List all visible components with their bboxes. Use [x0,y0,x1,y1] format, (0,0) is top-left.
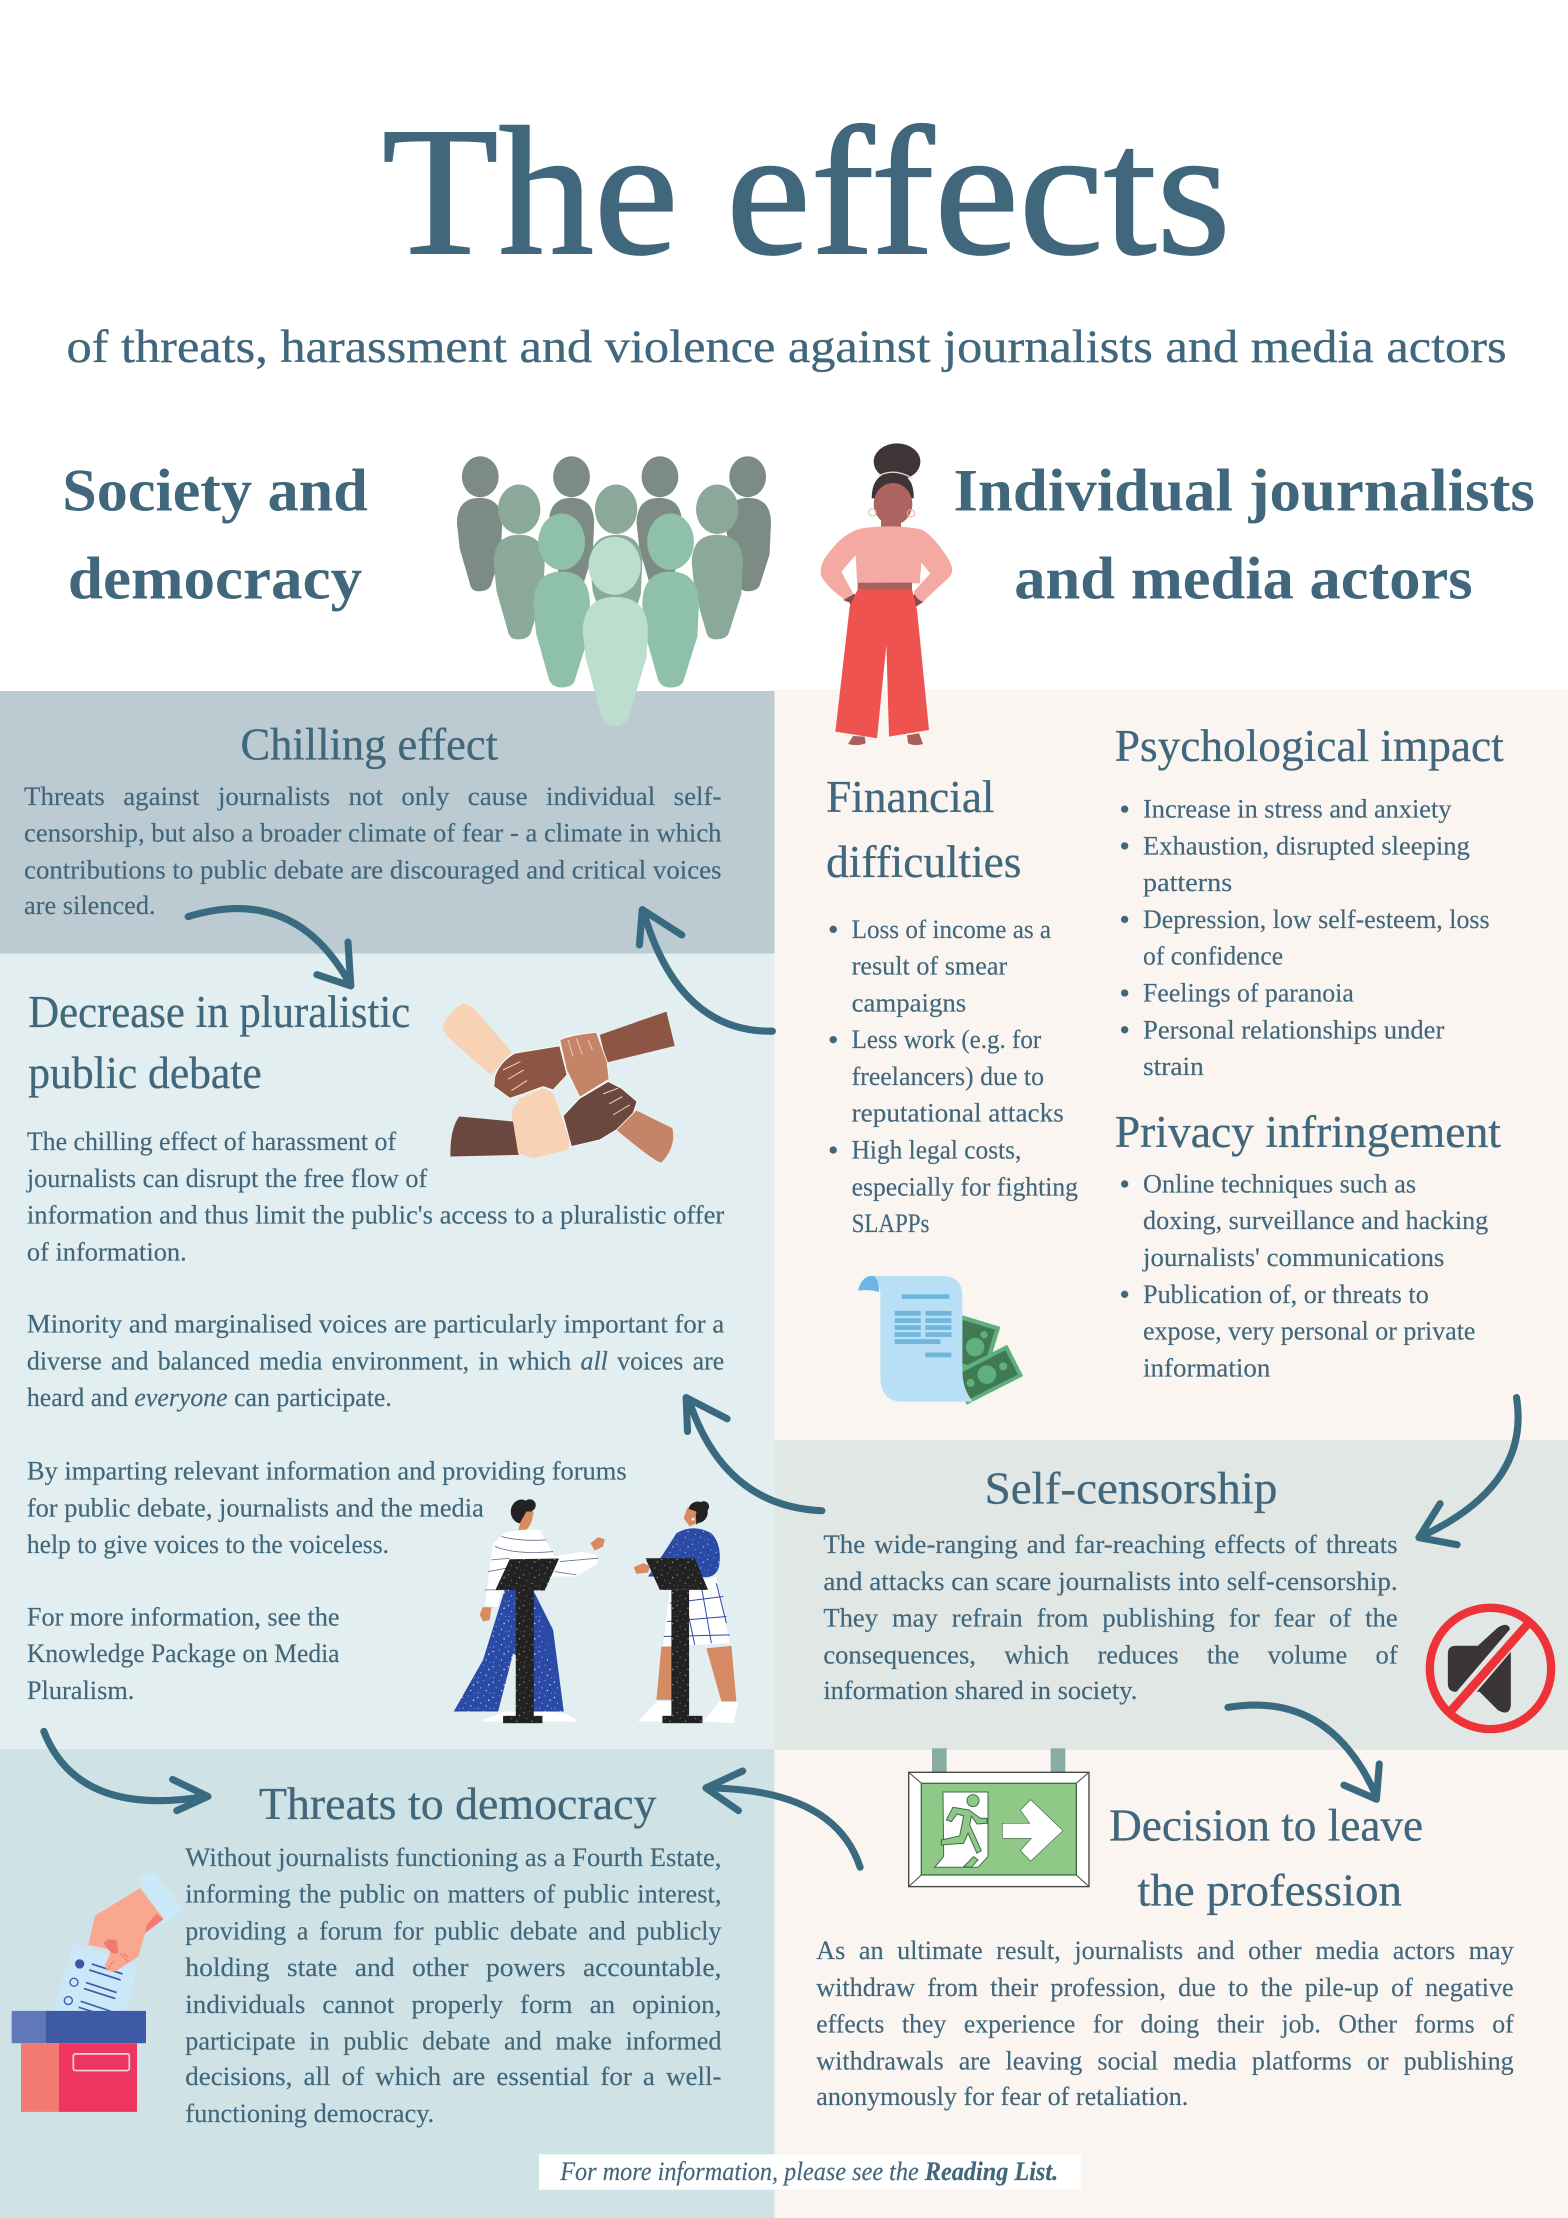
list: financial difficulties: SLAPPs [852,1209,929,1238]
arrow: chilling effect to decrease in debate [188,909,351,986]
footer note: For more information, please see the Reading List. [559,2157,1058,2186]
paragraph: self-censorship: information shared in society. [823,1676,1137,1705]
panel: self-censorship background [775,1440,1568,1750]
right speaker [634,1501,738,1723]
left speaker [450,1499,605,1723]
paragraph: self-censorship: consequences, which reduces the volume of [823,1641,1398,1669]
list: psychological impact: Feelings of paranoia [1143,978,1354,1007]
list: psychological impact: Increase in stress and anxiety [1143,795,1451,824]
list: financial difficulties: High legal costs, [852,1136,1021,1165]
list: privacy infringement: expose, very personal or private [1143,1317,1475,1346]
panel: threats to democracy background [0,1749,775,2218]
panel: decision to leave background [775,1750,1568,2218]
heading: individual journalists and media actors: and media actors [1014,545,1473,612]
paragraph: chilling effect: contributions to public debate are discouraged and critical voices [24,855,721,884]
heading: privacy infringement: Privacy infringement [1115,1107,1501,1157]
paragraphs: pluralistic debate: Pluralism. [27,1676,134,1705]
icon: legal bill and money [858,1276,1023,1405]
paragraph: threats to democracy: functioning democracy. [185,2099,434,2128]
list: psychological impact: of confidence [1143,942,1283,971]
list: psychological impact: Exhaustion, disrupted sleeping [1143,831,1470,860]
paragraphs: pluralistic debate: heard and everyone can participate. [27,1383,392,1412]
paragraphs: pluralistic debate: diverse and balanced media environment, in which all voices are [27,1346,724,1375]
text block: psychological impact [1115,721,1504,1081]
list: financial difficulties: freelancers) due to [852,1062,1044,1091]
paragraph: decision to leave: anonymously for fear of retaliation. [816,2082,1188,2111]
paragraph: decision to leave: withdraw from their profession, due to the pile-up of negative [816,1973,1514,2002]
list: privacy infringement: Publication of, or threats to [1143,1280,1429,1309]
text block: privacy infringement [1115,1107,1501,1382]
heading: society and democracy: democracy [68,545,362,612]
paragraphs: pluralistic debate: By imparting relevant information and providing forums [27,1457,627,1486]
heading: decrease in pluralistic public debate: public debate [28,1048,262,1098]
heading: decision to leave the profession: Decision to leave [1109,1800,1423,1850]
list: financial difficulties: Less work (e.g. for [852,1025,1041,1054]
arrow: individual panel to chilling effect [639,910,772,1031]
paragraph: threats to democracy: decisions, all of which are essential for a well- [185,2062,721,2091]
paragraph: self-censorship: They may refrain from publishing for fear of the [823,1604,1398,1633]
text block: decrease in pluralistic public debate [26,987,725,1705]
paragraphs: pluralistic debate: information and thus limit the public's access to a pluralistic offer [27,1201,725,1230]
heading: chilling effect: Chilling effect [240,720,498,770]
paragraphs: pluralistic debate: journalists can disrupt the free flow of [26,1164,428,1193]
panel: individual impacts background [775,690,1568,1441]
paragraph: decision to leave [816,1936,1514,2111]
list: privacy infringement: journalists' communications [1142,1243,1444,1272]
text block: financial difficulties [826,772,1078,1238]
paragraph: threats to democracy: holding state and other powers accountable, [185,1953,721,1982]
paragraph: threats to democracy [185,1843,721,2128]
text block: chilling effect [24,720,721,920]
heading: decrease in pluralistic public debate [28,987,410,1098]
arrow: self-censorship to decrease in debate [686,1398,822,1511]
paragraph: self-censorship: The wide-ranging and far-reaching effects of threats [823,1530,1398,1559]
icon: exit sign [909,1748,1089,1887]
paragraph: threats to democracy: informing the public on matters of public interest, [185,1880,721,1909]
list: privacy infringement: Online techniques such as [1143,1169,1416,1198]
paragraph: threats to democracy: Without journalists functioning as a Fourth Estate, [185,1843,721,1872]
paragraph: decision to leave: withdrawals are leaving social media platforms or publishing [816,2046,1514,2075]
heading: financial difficulties: Financial [826,772,995,822]
list: psychological impact: strain [1143,1052,1204,1081]
text block: decision to leave the profession [816,1800,1514,2111]
paragraph: threats to democracy: providing a forum for public debate and publicly [185,1916,721,1945]
list: privacy infringement [1121,1169,1488,1382]
text block: threats to democracy [185,1779,721,2128]
paragraph: self-censorship [823,1530,1398,1705]
illustration: two speakers at lecterns [450,1499,738,1723]
paragraph: chilling effect: censorship, but also a broader climate of fear - a climate in which [24,819,721,848]
paragraphs: pluralistic debate: Knowledge Package on Media [27,1639,340,1668]
heading: psychological impact: Psychological impact [1115,721,1504,771]
title: The effects [382,89,1231,293]
paragraph: self-censorship: and attacks can scare journalists into self-censorship. [823,1567,1398,1596]
paragraph: chilling effect: are silenced. [24,891,156,920]
list: privacy infringement: information [1143,1353,1270,1382]
heading: society and democracy [62,458,368,612]
list: financial difficulties: campaigns [852,988,966,1017]
heading: society and democracy: Society and [62,458,368,525]
arrow: self-censorship to decision to leave [1228,1705,1379,1799]
list: psychological impact [1121,795,1490,1081]
panel: decrease in pluralistic public debate background [0,953,775,1750]
list: psychological impact: patterns [1143,868,1232,897]
icon: woman standing [821,443,952,745]
icon: joined hands [442,1003,675,1163]
icon: muted speaker [1430,1608,1551,1729]
paragraphs: pluralistic debate: help to give voices to the voiceless. [27,1530,389,1559]
arrow: decision to leave to threats to democracy [706,1771,860,1867]
paragraph: decision to leave: effects they experience for doing their job. Other forms of [816,2010,1514,2039]
icon: crowd of people [457,456,771,726]
heading: decision to leave the profession [1109,1800,1423,1915]
list: privacy infringement: doxing, surveillance and hacking [1143,1206,1488,1235]
list: financial difficulties [830,915,1078,1238]
list: financial difficulties: Loss of income as a [852,915,1052,944]
paragraphs: pluralistic debate: of information. [27,1237,187,1266]
paragraphs: pluralistic debate [26,1127,725,1705]
heading: self-censorship: Self-censorship [985,1464,1277,1514]
paragraph: threats to democracy: participate in public debate and make informed [185,2027,721,2056]
paragraphs: pluralistic debate: Minority and marginalised voices are particularly important for a [27,1309,725,1338]
arrow: decrease in debate to threats to democracy [44,1731,208,1811]
heading: decrease in pluralistic public debate: Decrease in pluralistic [28,987,410,1037]
heading: threats to democracy: Threats to democracy [259,1779,657,1829]
paragraph: threats to democracy: individuals cannot properly form an opinion, [185,1990,721,2019]
heading: financial difficulties [826,772,1021,887]
heading: individual journalists and media actors [953,458,1535,612]
subtitle: of threats, harassment and violence against journalists and media actors [66,321,1507,373]
paragraphs: pluralistic debate: for public debate, journalists and the media [27,1493,484,1522]
list: psychological impact: Depression, low self-esteem, loss [1143,905,1490,934]
paragraph: chilling effect [24,782,721,920]
paragraph: decision to leave: As an ultimate result, journalists and other media actors may [816,1936,1514,1965]
heading: financial difficulties: difficulties [826,837,1021,887]
list: financial difficulties: reputational attacks [852,1099,1064,1128]
paragraphs: pluralistic debate: The chilling effect of harassment of [27,1127,396,1156]
list: financial difficulties: result of smear [852,952,1008,981]
arrow: privacy to self-censorship [1419,1398,1518,1545]
list: financial difficulties: especially for fighting [852,1172,1078,1201]
heading: decision to leave the profession: the profession [1137,1865,1402,1915]
paragraph: chilling effect: Threats against journalists not only cause individual self- [24,782,721,811]
list: psychological impact: Personal relationships under [1143,1015,1445,1044]
panel: chilling effect background [0,691,775,954]
heading: individual journalists and media actors: Individual journalists [953,458,1535,525]
text block: self-censorship [823,1464,1398,1705]
paragraphs: pluralistic debate: For more information, see the [27,1602,340,1631]
icon: ballot box [12,1871,183,2112]
